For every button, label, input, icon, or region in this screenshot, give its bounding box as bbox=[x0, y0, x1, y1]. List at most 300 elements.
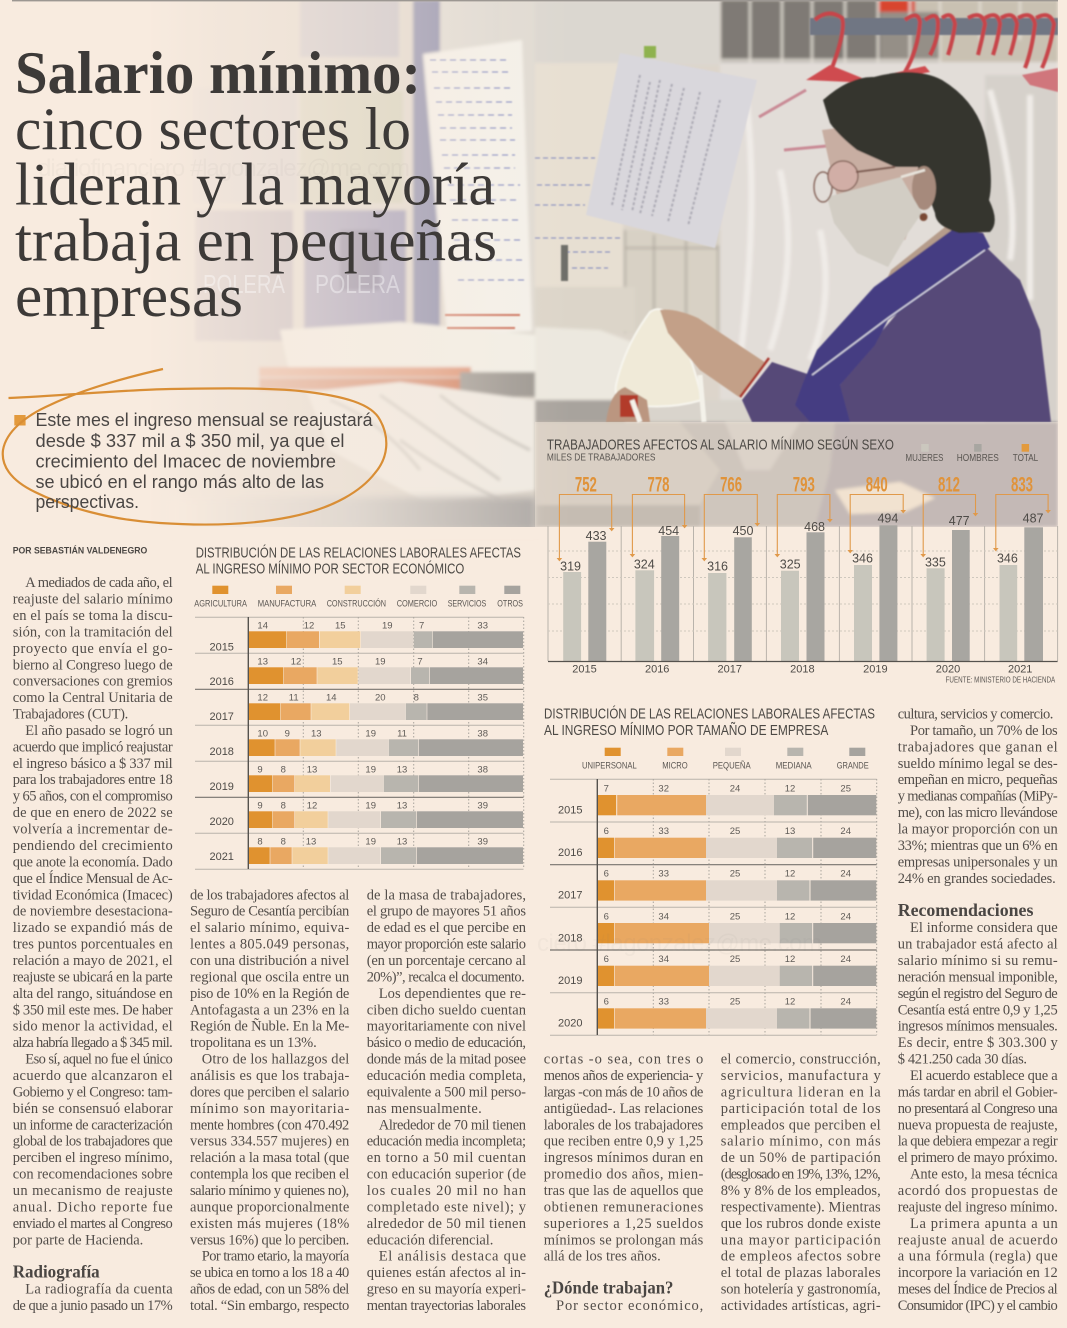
segment values: 15 bbox=[335, 621, 346, 632]
year labels: 2016 bbox=[645, 663, 669, 675]
totals with brackets: 766 bbox=[720, 474, 742, 497]
segment values: 6 bbox=[604, 826, 609, 837]
segment values: 33 bbox=[477, 621, 488, 632]
article column 3: quienes están afectos al in- bbox=[367, 1265, 526, 1281]
article column 4: tras que las de aquellos que bbox=[544, 1183, 703, 1199]
article column 3: básico o medio de educación, bbox=[367, 1035, 526, 1051]
year labels: 2015 bbox=[209, 641, 234, 653]
article column 3: Los dependientes que re- bbox=[379, 986, 526, 1002]
article column 6 bottom: según el registro del Seguro de bbox=[898, 986, 1058, 1002]
article column 6 top: 33%; mientras que un 6% en bbox=[898, 838, 1058, 854]
bar values: 324 bbox=[634, 557, 655, 571]
title: empresas bbox=[15, 263, 243, 329]
chart heading bbox=[547, 436, 894, 464]
segment values: 12 bbox=[307, 801, 317, 812]
article column 1: Trabajadores (CUT). bbox=[13, 706, 128, 722]
year labels: 2016 bbox=[209, 676, 234, 688]
totals with brackets: 778 bbox=[648, 474, 670, 497]
bar values: 433 bbox=[586, 529, 607, 543]
article column 1: acuerdo que alcanzaron el bbox=[13, 1068, 173, 1084]
segment values: 38 bbox=[477, 729, 488, 740]
article column 1: que anote la economía. Dado bbox=[13, 854, 173, 870]
article column 4: allá de los tres años. bbox=[544, 1249, 661, 1265]
segment values: 13 bbox=[785, 826, 795, 837]
heading: ¿Dónde trabajan?: ¿Dónde trabajan? bbox=[544, 1277, 673, 1297]
watermark: diariofinanciero #lagonzalez@me.com bbox=[38, 155, 410, 182]
segment values: 12 bbox=[785, 911, 795, 922]
article column 5: salario mínimo, con más bbox=[721, 1134, 881, 1150]
legend: SERVICIOS bbox=[448, 598, 486, 608]
totals with brackets: 752 bbox=[575, 474, 597, 497]
article column 1: pendiendo del crecimiento bbox=[13, 838, 173, 854]
segment values: 12 bbox=[785, 869, 795, 880]
article column 2: Región de Ñuble. En la Me- bbox=[190, 1019, 349, 1035]
article column 2: años de edad, con un 58% del bbox=[190, 1282, 349, 1298]
article column 6 top: me), con las micro llevándose bbox=[898, 805, 1058, 821]
article column 6 bottom: ingresos mínimos mensuales. bbox=[898, 1019, 1058, 1035]
article column 1: para los trabajadores entre 18 bbox=[13, 772, 173, 788]
legend: MANUFACTURA bbox=[258, 598, 316, 608]
article column 4 bbox=[544, 1052, 704, 1265]
article column 2: de los trabajadores afectos al bbox=[190, 887, 349, 903]
article column 2: Otro de los hallazgos del bbox=[202, 1052, 349, 1068]
article column 6 bottom: meses del Índice de Precios al bbox=[898, 1281, 1058, 1298]
year labels bbox=[209, 641, 234, 863]
stacked bars bbox=[598, 795, 876, 1029]
segment values: 9 bbox=[285, 729, 290, 740]
legend: UNIPERSONAL bbox=[582, 760, 637, 770]
article column 1: proyecto que envía el go- bbox=[13, 641, 173, 657]
article column 1: A mediados de cada año, el bbox=[25, 575, 173, 591]
poster lettering in photo: POLERA bbox=[315, 269, 401, 299]
article column 1: volvería a incrementar de- bbox=[13, 822, 173, 838]
article column 3 bbox=[367, 887, 527, 1314]
segment values: 39 bbox=[477, 801, 488, 812]
segment values: 13 bbox=[311, 729, 322, 740]
callout bbox=[3, 369, 386, 525]
bar values: 477 bbox=[949, 514, 970, 528]
article column 6 bottom: nueva propuesta de reajuste, bbox=[898, 1117, 1058, 1133]
segment values: 38 bbox=[477, 765, 488, 776]
article column 1: bién se consensuó elaborar bbox=[13, 1101, 173, 1117]
article column 3: mayoritariamente con nivel bbox=[367, 1019, 526, 1035]
article column 6 bottom bbox=[898, 920, 1058, 1314]
article column 3: greso en su mayoría experi- bbox=[367, 1282, 526, 1298]
article column 6 bottom: El informe considera que bbox=[910, 920, 1058, 936]
year labels: 2021 bbox=[209, 851, 234, 863]
segment values: 6 bbox=[604, 869, 609, 880]
article column 3: de la masa de trabajadores, bbox=[367, 887, 526, 903]
legend: COMERCIO bbox=[397, 598, 437, 608]
article column 1: sido menor la actividad, el bbox=[13, 1019, 173, 1035]
heading: Radiografía: Radiografía bbox=[13, 1262, 100, 1282]
segment values: 8 bbox=[281, 765, 286, 776]
heading bbox=[544, 705, 875, 739]
chart band veil bbox=[535, 422, 1058, 527]
year labels: 2019 bbox=[558, 975, 583, 987]
article column 1: lizado se expandió más de bbox=[13, 920, 173, 936]
callout text bbox=[36, 409, 373, 512]
legend: TOTAL bbox=[1013, 453, 1039, 464]
article column 5: servicios, manufactura y bbox=[721, 1068, 881, 1084]
article column 6 bottom: Consumidor (IPC) y el cambio bbox=[898, 1298, 1058, 1314]
article column 6 top: y medianas compañías (MiPy- bbox=[898, 789, 1058, 805]
article column 4: ingresos mínimos duran en bbox=[544, 1150, 704, 1166]
article column 1: de noviembre desestaciona- bbox=[13, 904, 173, 920]
segment values: 13 bbox=[257, 657, 268, 668]
legend: PEQUEÑA bbox=[713, 760, 751, 770]
year labels: 2020 bbox=[936, 663, 960, 675]
bar values: 346 bbox=[997, 551, 1018, 565]
segment values: 13 bbox=[306, 837, 316, 848]
segment values: 12 bbox=[785, 783, 795, 794]
year labels: 2017 bbox=[209, 711, 234, 723]
segment values: 14 bbox=[326, 693, 337, 704]
article column 2: Antofagasta a un 23% en la bbox=[190, 1002, 350, 1018]
legend: OTROS bbox=[497, 598, 523, 608]
article column 1: de que en enero de 2022 se bbox=[13, 805, 173, 821]
callout text: Este mes el ingreso mensual se reajustará bbox=[36, 409, 373, 430]
top rule bbox=[12, 0, 1058, 1]
right margin bbox=[1058, 0, 1067, 527]
article column 2: el salario mínimo, equiva- bbox=[190, 920, 349, 936]
segment values: 24 bbox=[840, 954, 851, 965]
article column 2: contempla los que reciben el bbox=[190, 1167, 349, 1183]
chart: distribución por tamaño de empresa bbox=[537, 705, 877, 1035]
article column 6 top: trabajadores que ganan el bbox=[898, 739, 1058, 755]
year labels: 2019 bbox=[209, 781, 234, 793]
chart heading: TRABAJADORES AFECTOS AL SALARIO MÍNIMO SEGÚN SEXO bbox=[547, 436, 894, 453]
article column 3: donde más de la mitad posee bbox=[367, 1052, 526, 1068]
segment values: 24 bbox=[730, 783, 740, 794]
year labels: 2017 bbox=[558, 890, 583, 902]
article column 1: tividad Económica (Imacec) bbox=[13, 887, 173, 903]
article column 4: promedio dos años, mien- bbox=[544, 1167, 703, 1183]
heading bbox=[196, 545, 521, 577]
page cover below photo bbox=[0, 527, 1067, 539]
legend: AGRICULTURA bbox=[194, 598, 247, 608]
article column 2: Seguro de Cesantía percibían bbox=[190, 904, 350, 920]
article column 2: total. “Sin embargo, respecto bbox=[190, 1298, 349, 1314]
bar values: 316 bbox=[707, 560, 728, 574]
title: trabaja en pequeñas bbox=[15, 207, 497, 273]
article column 3: educación media completa, bbox=[367, 1068, 526, 1084]
segment values: 8 bbox=[257, 837, 263, 848]
year labels: 2015 bbox=[558, 804, 583, 816]
segment values: 9 bbox=[257, 765, 263, 776]
article column 6 top: empresas unipersonales y un bbox=[898, 854, 1058, 870]
article column 5: de empleos afectos sobre bbox=[721, 1249, 881, 1265]
segment values: 19 bbox=[365, 765, 376, 776]
article column 1: Eso sí, aquel no fue el único bbox=[25, 1052, 173, 1068]
article column 3: alrededor de 50 mil tienen bbox=[367, 1216, 527, 1232]
legend bbox=[906, 444, 1039, 464]
article column 1: $ 350 mil este mes. De haber bbox=[13, 1002, 173, 1018]
segment values: 25 bbox=[730, 869, 740, 880]
segment values: 13 bbox=[397, 837, 407, 848]
chart heading: MILES DE TRABAJADORES bbox=[547, 453, 656, 464]
article column 3: mayor proporción este salario bbox=[367, 936, 526, 952]
bars bbox=[563, 525, 1043, 662]
bar values: 450 bbox=[733, 524, 753, 538]
article column 4: superiores a 1,25 sueldos bbox=[544, 1216, 704, 1232]
segment values: 24 bbox=[840, 911, 851, 922]
article column 1: sión, con la tramitación del bbox=[13, 624, 173, 640]
legend: GRANDE bbox=[837, 760, 869, 770]
segment values: 15 bbox=[332, 657, 343, 668]
article column 1 end: de que a junio pasado un 17% bbox=[13, 1298, 173, 1314]
article column 3: en torno a 50 mil cuentan bbox=[367, 1150, 527, 1166]
segment values: 19 bbox=[365, 837, 376, 848]
article column 4: menos años de experiencia- y bbox=[544, 1068, 704, 1084]
segment values: 34 bbox=[658, 954, 669, 965]
poster lettering in photo bbox=[203, 269, 401, 299]
callout text: se ubicó en el rango más alto de las bbox=[36, 471, 324, 492]
article column 5: empleados que perciben el bbox=[721, 1117, 881, 1133]
segment values: 24 bbox=[840, 997, 851, 1008]
segment values: 12 bbox=[785, 954, 795, 965]
article column 6 top: Por tamaño, un 70% de los bbox=[910, 723, 1058, 739]
article column 2: lentes a 805.049 personas, bbox=[190, 936, 349, 952]
article column 3: de edad es el que percibe en bbox=[367, 920, 527, 936]
article column 5: (desglosado en 19%, 13%, 12%, bbox=[721, 1167, 881, 1183]
icon: orange bullet bbox=[14, 415, 26, 426]
article column 1: relación a mayo de 2021, el bbox=[13, 953, 173, 969]
segment values: 35 bbox=[477, 693, 488, 704]
article column 1: un informe de caracterización bbox=[13, 1117, 173, 1133]
article column 5: agricultura lideran en la bbox=[721, 1084, 881, 1100]
segment values: 32 bbox=[658, 783, 669, 794]
segment values: 19 bbox=[365, 801, 376, 812]
segment values: 13 bbox=[397, 801, 407, 812]
bar values: 468 bbox=[804, 520, 825, 534]
article column 2: regional que oscila entre un bbox=[190, 969, 350, 985]
segment values: 7 bbox=[419, 621, 424, 632]
segment values: 24 bbox=[840, 826, 851, 837]
segment values: 8 bbox=[281, 837, 286, 848]
article column 2: se ubica en torno a los 18 a 40 bbox=[190, 1265, 349, 1281]
article column 3: El análisis destaca que bbox=[379, 1249, 526, 1265]
article column 5: el total de plazas laborales bbox=[721, 1265, 881, 1281]
year labels: 2018 bbox=[209, 746, 234, 758]
article column 2: análisis es que los trabaja- bbox=[190, 1068, 349, 1084]
legend: HOMBRES bbox=[957, 453, 999, 464]
article column 3: ciben dicho sueldo cuentan bbox=[367, 1002, 527, 1018]
article column 2: tropolitana es un 13%. bbox=[190, 1035, 317, 1051]
article column 3: equivalente a 500 mil perso- bbox=[367, 1084, 526, 1100]
article column 1 end bbox=[13, 1282, 173, 1314]
segment values: 25 bbox=[840, 783, 851, 794]
segment values: 13 bbox=[307, 765, 317, 776]
segment values: 33 bbox=[658, 869, 669, 880]
article column 1: acuerdo que implicó reajustar bbox=[13, 739, 173, 755]
segment values: 34 bbox=[477, 657, 488, 668]
heading: DISTRIBUCIÓN DE LAS RELACIONES LABORALES AFECTAS bbox=[196, 545, 521, 562]
article column 5: una mayor participación bbox=[721, 1232, 881, 1248]
article column 5: respectivamente). Mientras bbox=[721, 1199, 881, 1215]
hand-drawn orange ellipse bbox=[3, 369, 386, 525]
segment values: 25 bbox=[730, 826, 740, 837]
article column 6 bottom: reajuste anual de acuerdo bbox=[898, 1232, 1058, 1248]
heading: Recomendaciones: Recomendaciones bbox=[898, 900, 1033, 920]
article column 1: conversaciones con gremios bbox=[13, 674, 173, 690]
article column 4 end: Por sector económico, bbox=[556, 1298, 703, 1314]
poster lettering in photo: POLERA bbox=[203, 269, 286, 299]
article column 2: mente hombres (con 470.492 bbox=[190, 1117, 349, 1133]
segment values: 11 bbox=[397, 729, 407, 740]
chart: trabajadores afectos según sexo bbox=[547, 436, 1058, 685]
year labels bbox=[558, 804, 583, 1030]
heading: AL INGRESO MÍNIMO POR TAMAÑO DE EMPRESA bbox=[544, 722, 829, 739]
heading: AL INGRESO MÍNIMO POR SECTOR ECONÓMICO bbox=[196, 560, 464, 577]
article column 1: perciben el ingreso mínimo, bbox=[13, 1150, 173, 1166]
article column 5: actividades artísticas, agri- bbox=[721, 1298, 881, 1314]
segment values: 25 bbox=[730, 911, 740, 922]
article column 4: mínimos se prolongan más bbox=[544, 1232, 704, 1248]
article column 2: existen más mujeres (18% bbox=[190, 1216, 349, 1232]
title: cinco sectores lo bbox=[15, 96, 411, 162]
article column 6 bottom: Es decir, entre $ 303.300 y bbox=[898, 1035, 1058, 1051]
article column 6 bottom: un trabajador está afecto al bbox=[898, 936, 1058, 952]
callout text: perspectivas. bbox=[36, 491, 139, 512]
segment values: 7 bbox=[604, 783, 609, 794]
photo: seamstress holding a face mask bbox=[0, 0, 1067, 539]
year labels bbox=[572, 663, 1032, 675]
bar values: 325 bbox=[780, 557, 801, 571]
article column 5: de un 50% de partipación bbox=[721, 1150, 881, 1166]
article column 6 bottom: El acuerdo establece que a bbox=[910, 1068, 1058, 1084]
article column 1: por parte de Hacienda. bbox=[13, 1232, 143, 1248]
article column 1: y 65 años, con el compromiso bbox=[13, 789, 173, 805]
year labels: 2019 bbox=[863, 663, 888, 675]
article column 2: dores que perciben el salario bbox=[190, 1084, 349, 1100]
article column 6 bottom: $ 421.250 cada 30 días. bbox=[898, 1052, 1027, 1068]
chart: distribución por sector económico bbox=[194, 545, 524, 869]
segment values: 33 bbox=[658, 997, 669, 1008]
article column 3: educación diferencial. bbox=[367, 1232, 493, 1248]
article column 6 bottom: La primera apunta a un bbox=[910, 1216, 1058, 1232]
article column 1: alza habría llegado a $ 345 mil. bbox=[13, 1035, 173, 1051]
article column 3: nas mensualmente. bbox=[367, 1101, 482, 1117]
segment values: 10 bbox=[257, 729, 268, 740]
article column 2 bbox=[190, 887, 350, 1314]
article column 2: aunque proporcionalmente bbox=[190, 1199, 349, 1215]
article column 3: educación media incompleta; bbox=[367, 1134, 526, 1150]
article column 3: mentan trayectorias laborales bbox=[367, 1298, 526, 1314]
segment values: 20 bbox=[375, 693, 386, 704]
title: Salario mínimo: bbox=[15, 40, 421, 106]
segment values: 25 bbox=[730, 997, 740, 1008]
article column 4: cortas -o sea, con tres o bbox=[544, 1052, 703, 1068]
year labels: 2016 bbox=[558, 847, 583, 859]
article column 1: que el Índice Mensual de Ac- bbox=[13, 870, 173, 887]
segment values: 6 bbox=[604, 997, 609, 1008]
segment values: 11 bbox=[289, 693, 299, 704]
year labels: 2018 bbox=[558, 932, 583, 944]
stacked bars bbox=[249, 631, 523, 864]
article column 6 bottom: incorpore la variación en 12 bbox=[898, 1265, 1058, 1281]
article column 6 top: la mayor proporción con un bbox=[898, 822, 1058, 838]
year labels: 2020 bbox=[558, 1018, 583, 1030]
year labels: 2021 bbox=[1008, 663, 1032, 675]
segment values: 8 bbox=[281, 801, 286, 812]
totals with brackets: 840 bbox=[866, 474, 888, 497]
article column 2: con una distribución a nivel bbox=[190, 953, 349, 969]
legend: MUJERES bbox=[906, 453, 944, 464]
article column 6 bottom: reajuste del ingreso mínimo. bbox=[898, 1199, 1058, 1215]
article column 2: Por tramo etario, la mayoría bbox=[202, 1249, 350, 1265]
segment values: 39 bbox=[477, 837, 488, 848]
article column 3: con educación superior (de bbox=[367, 1167, 526, 1183]
article column 2: relación a la masa total (que bbox=[190, 1150, 349, 1166]
segment values: 9 bbox=[257, 801, 263, 812]
article column 3: Alrededor de 70 mil tienen bbox=[379, 1117, 527, 1133]
segment values: 25 bbox=[730, 954, 740, 965]
segment values: 12 bbox=[291, 657, 301, 668]
segment values: 7 bbox=[417, 657, 423, 668]
segment values: 19 bbox=[375, 657, 386, 668]
bar values: 335 bbox=[925, 556, 946, 570]
article column 1: tres puntos porcentuales en bbox=[13, 936, 173, 952]
article column 1: reajuste se ubicará en la parte bbox=[13, 969, 173, 985]
article column 6 bottom: a una fórmula (regla) que bbox=[898, 1249, 1058, 1265]
article column 3: (en un porcentaje cercano al bbox=[367, 953, 526, 969]
article column 6 bottom: más tardar en abril el Gobier- bbox=[898, 1084, 1058, 1100]
article column 3: completado este nivel); y bbox=[367, 1199, 527, 1215]
callout text: desde $ 337 mil a $ 350 mil, ya que el bbox=[36, 430, 344, 451]
article column 1: un mecanismo de reajuste bbox=[13, 1183, 173, 1199]
bar values bbox=[560, 511, 1044, 574]
article column 1: Gobierno y el Congreso: tam- bbox=[13, 1084, 173, 1100]
title: lideran y la mayoría bbox=[15, 152, 495, 218]
article column 4: largas -con más de 10 años de bbox=[544, 1084, 703, 1100]
article column 3: 20%)”, recalca el documento. bbox=[367, 969, 525, 985]
legend: MEDIANA bbox=[776, 760, 812, 770]
legend: CONSTRUCCIÓN bbox=[327, 598, 386, 608]
article column 1 end: La radiografía da cuenta bbox=[25, 1282, 173, 1298]
article column 4: que reciben entre 0,9 y 1,25 bbox=[544, 1134, 703, 1150]
segment values: 6 bbox=[604, 954, 609, 965]
article column 1: anual. Dicho reporte fue bbox=[13, 1199, 173, 1215]
segment values: 6 bbox=[604, 911, 609, 922]
article column 3: los cuales 20 mil no han bbox=[367, 1183, 527, 1199]
segment values: 19 bbox=[382, 621, 393, 632]
year labels: 2015 bbox=[572, 663, 597, 675]
bar values: 346 bbox=[852, 551, 873, 565]
article column 6 bottom: no presentará al Congreso una bbox=[898, 1101, 1058, 1117]
article column 2: piso de 10% en la Región de bbox=[190, 986, 349, 1002]
article column 2: mínimo son mayoritaria- bbox=[190, 1101, 349, 1117]
article column 1: en el país se toma la discu- bbox=[13, 608, 173, 624]
legend bbox=[582, 748, 869, 770]
article column 6 top: sueldo mínimo legal se des- bbox=[898, 756, 1058, 772]
totals with brackets: 793 bbox=[793, 474, 815, 497]
table fade bbox=[170, 497, 536, 531]
article column 2: versus 16%) que lo perciben. bbox=[190, 1232, 349, 1248]
article column 6 bottom: salario mínimo si su remu- bbox=[898, 953, 1058, 969]
segment values: 12 bbox=[785, 997, 795, 1008]
segment values bbox=[604, 783, 851, 1008]
article column 5: son hotelería y gastronomía, bbox=[721, 1282, 881, 1298]
segment values: 14 bbox=[257, 621, 268, 632]
segment values: 34 bbox=[658, 911, 669, 922]
article column 1: enviado el martes al Congreso bbox=[13, 1216, 173, 1232]
article column 1: bierno al Congreso luego de bbox=[13, 657, 173, 673]
article column 1: con recomendaciones sobre bbox=[13, 1167, 173, 1183]
article column 1: global de los trabajadores que bbox=[13, 1134, 173, 1150]
article column 6 bottom: acordó dos propuestas de bbox=[898, 1183, 1058, 1199]
article column 6 top: empeñan en micro, pequeñas bbox=[898, 772, 1058, 788]
